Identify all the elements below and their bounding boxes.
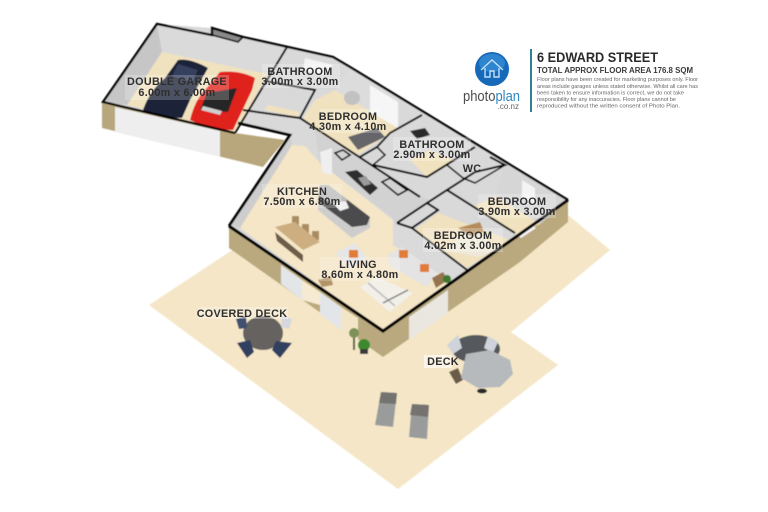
furniture: kitchen island and bench (318, 148, 378, 238)
title block: been taken to ensure information is correct, we do not take (537, 90, 684, 96)
room labels: KITCHEN (277, 186, 327, 198)
title block: TOTAL APPROX FLOOR AREA 176.8 SQM (537, 66, 693, 75)
furniture: dining table (275, 216, 320, 262)
room labels: 7.50m x 6.80m (263, 196, 341, 208)
photoplan logo: photoplan (463, 89, 520, 105)
room labels: BEDROOM (319, 111, 377, 123)
title block (537, 49, 698, 110)
exterior walls (102, 103, 568, 357)
room floors (127, 52, 540, 331)
photoplan logo (463, 52, 520, 111)
room labels (125, 64, 556, 368)
room labels: BEDROOM (434, 230, 492, 242)
furniture: living sofas and rug (318, 243, 451, 312)
sun loungers (375, 392, 429, 439)
room labels: BEDROOM (488, 196, 546, 208)
room labels: 4.30m x 4.10m (309, 121, 387, 133)
covered deck table (236, 316, 292, 358)
wall shading (104, 24, 567, 282)
photoplan logo: .co.nz (498, 102, 519, 111)
room labels: BATHROOM (267, 66, 333, 78)
floor plan (102, 24, 610, 489)
title block: 6 EDWARD STREET (537, 49, 658, 65)
furniture: double garage cars (143, 60, 255, 130)
plants (349, 328, 370, 354)
title block: areas include garages unless stated otherwise. Whilst all care has (537, 84, 698, 90)
building interior base (103, 24, 568, 331)
room labels: LIVING (339, 259, 377, 271)
room labels: WC (463, 163, 481, 175)
room labels: 4.02m x 3.00m (424, 240, 502, 252)
room labels: 3.90m x 3.00m (478, 206, 556, 218)
room labels: 8.60m x 4.80m (321, 269, 399, 281)
deck table and parasol (447, 335, 513, 394)
room labels: 2.90m x 3.00m (393, 149, 471, 161)
title block: Floor plans have been created for marketing purposes only. Floor (537, 77, 698, 83)
room labels: DOUBLE GARAGE (127, 76, 227, 88)
room labels: DECK (427, 356, 459, 368)
room labels: COVERED DECK (197, 308, 287, 320)
interior and exterior wall lines (103, 24, 568, 331)
title block: responsibility for any inaccuracies. Floor plans cannot be (537, 97, 676, 103)
title block: reproduced without the written consent of Photo Plan. (537, 104, 680, 110)
room labels: BATHROOM (399, 139, 465, 151)
room labels: 3.00m x 3.00m (261, 76, 339, 88)
deck surface (149, 215, 610, 489)
furniture: bedrooms (344, 91, 500, 257)
divider line (530, 49, 532, 112)
room labels: 6.00m x 6.00m (138, 87, 216, 99)
